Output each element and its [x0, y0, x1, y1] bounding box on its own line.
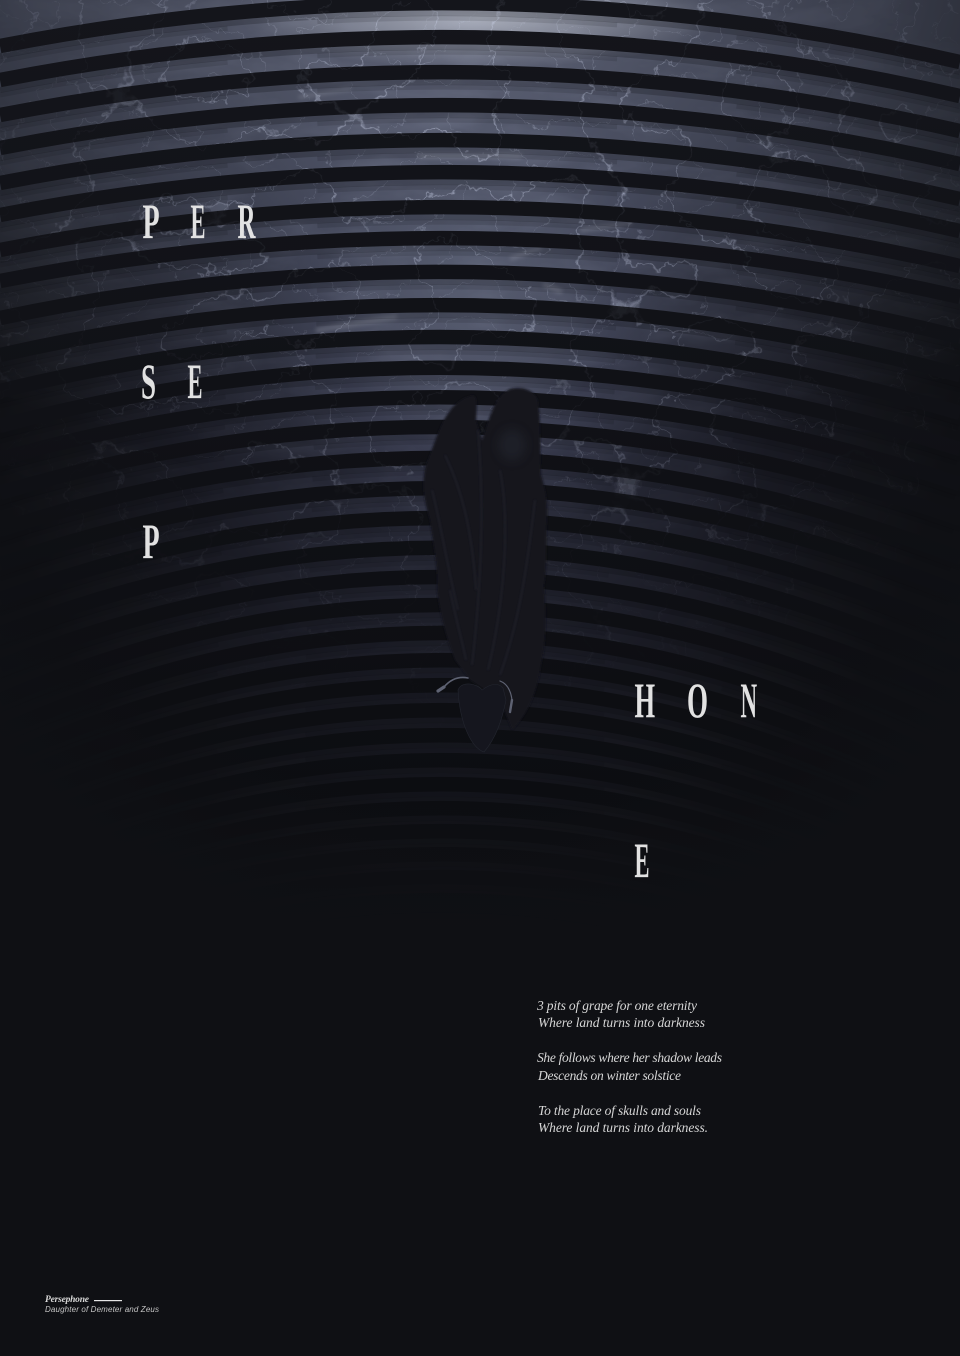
body: [458, 684, 506, 752]
caption rule: [94, 1300, 122, 1301]
faint veins over bands: [96, 0, 845, 492]
poem: She follows where her shadow leads: [537, 1050, 722, 1065]
poem: Where land turns into darkness: [538, 1015, 705, 1030]
figure: winged Persephone falling: [423, 388, 547, 752]
title line: PER: P: [142, 194, 160, 249]
wings silhouette: [423, 388, 547, 730]
bright marble patches: [300, 89, 630, 330]
lit marble glow: [0, 0, 960, 782]
dark bands: [0, 3, 960, 1041]
title line: PER: E: [190, 194, 206, 250]
title line: SE: E: [188, 354, 203, 410]
title line: SE: S: [141, 353, 156, 409]
title line: P: P: [142, 514, 160, 569]
poem: [536, 998, 722, 1135]
poem: To the place of skulls and souls: [538, 1103, 701, 1118]
title line: SE: [141, 353, 203, 410]
caption name: Persephone: [45, 1295, 90, 1305]
feather highlights: [432, 430, 535, 675]
wing shoulder shade: [498, 429, 526, 461]
arms and hands: [438, 677, 512, 712]
caption subtitle: Daughter of Demeter and Zeus: [45, 1305, 159, 1314]
title line: E: E: [634, 833, 650, 889]
poem: Where land turns into darkness.: [538, 1120, 708, 1135]
staggered half-tone bands: [0, 13, 960, 1056]
poem: Descends on winter solstice: [537, 1068, 681, 1083]
title line: HON: O: [687, 672, 708, 728]
title line: HON: H: [634, 672, 655, 728]
title line: PER: [142, 194, 256, 250]
poem: 3 pits of grape for one eternity: [536, 998, 697, 1013]
title line: HON: [634, 672, 757, 729]
title: Persephone, staggered letters: [141, 194, 757, 889]
title line: HON: N: [740, 673, 757, 729]
title line: PER: R: [238, 194, 256, 249]
panel: curved marble stripes: [0, 0, 960, 776]
footer caption: [45, 1295, 159, 1314]
